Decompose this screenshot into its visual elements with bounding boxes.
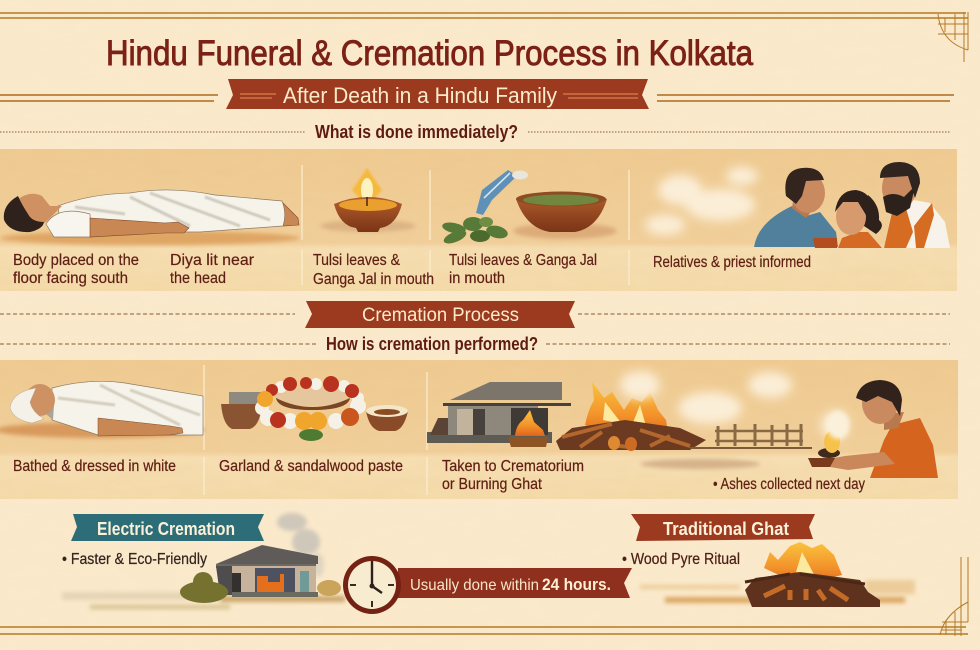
banner [398, 568, 632, 598]
caption: floor facing south: floor facing south [13, 270, 128, 287]
caption: diya lit: Diya lit near [170, 252, 254, 269]
callout: usually done within 24 hours [343, 556, 632, 614]
caption: tulsi and ganga jal: Tulsi leaves & Ganga Jal [449, 252, 597, 269]
smoke clouds [645, 167, 758, 235]
icon: spoon pouring Ganga Jal [476, 170, 528, 215]
captions [13, 252, 811, 288]
caption: the head: the head [170, 270, 226, 287]
caption: relatives: Relatives & priest informed [653, 254, 811, 271]
heading ribbon: Cremation Process [0, 301, 950, 328]
caption: burning ghat: or Burning Ghat [442, 476, 543, 493]
caption: in mouth: in mouth [449, 270, 505, 287]
caption: ashes collected: • Ashes collected next day [713, 476, 865, 493]
illustration: burning pyre [556, 382, 706, 451]
illustration: body dressed in white [10, 381, 203, 436]
illustration: man collecting ashes [808, 380, 938, 478]
illustration: fence [690, 424, 812, 448]
smoke [277, 513, 324, 577]
icon: bowl of tulsi water [513, 192, 617, 239]
illustration: relatives and priest [754, 162, 950, 248]
illustration: body on floor [4, 190, 299, 237]
icon: electric crematorium building [216, 545, 318, 597]
icon: lit diya [320, 168, 416, 232]
caption: tulsi leaves: Tulsi leaves & [313, 252, 401, 269]
illustration: crematorium building [427, 382, 571, 447]
illustration: sandalwood block in bowl [221, 392, 262, 429]
banner: Usually done within [410, 577, 539, 594]
ribbon: Electric Cremation: Electric Cremation [97, 519, 235, 539]
subheading: How is cremation performed?: How is cremation performed? [326, 334, 538, 354]
caption: body placed: Body placed on the [13, 252, 139, 269]
icon: bushes [180, 572, 341, 603]
bullet: wood pyre ritual: • Wood Pyre Ritual [622, 551, 740, 568]
ribbon: Traditional Ghat: Traditional Ghat [663, 519, 789, 539]
title: Hindu Funeral & Cremation Process in Kolkata [106, 34, 753, 73]
bottom decorative border with corner ornament [0, 557, 968, 636]
panel: traditional ghat [622, 514, 915, 607]
heading ribbon: Cremation Process: Cremation Process [362, 305, 519, 326]
subheading: What is done immediately?: What is done immediately? [315, 122, 518, 142]
caption: ganga jal: Ganga Jal in mouth [313, 271, 434, 288]
ground wash [640, 580, 915, 603]
illustration: flower garland [255, 376, 366, 441]
bullet: faster and eco-friendly: • Faster & Eco-Friendly [62, 551, 207, 568]
banner: 24 hours. [542, 575, 611, 594]
caption: garland: Garland & sandalwood paste [219, 458, 403, 475]
smoke [620, 371, 849, 439]
icon: tulsi leaves [441, 217, 509, 246]
panel: immediate steps [0, 149, 957, 291]
top decorative border with corner ornament [0, 12, 968, 62]
ribbon: Electric Cremation [71, 514, 264, 541]
ribbon: Traditional Ghat [631, 514, 815, 541]
icon: clock [343, 556, 401, 614]
illustration: paste bowl [366, 405, 408, 431]
heading ribbon: After Death in a Hindu Family: After Death in a Hindu Family [283, 83, 557, 108]
heading ribbon: After Death in a Hindu Family [0, 79, 954, 109]
panel: electric cremation [62, 513, 345, 609]
caption: taken to crematorium: Taken to Crematorium [442, 458, 584, 475]
icon: pyre [745, 542, 880, 607]
captions [13, 458, 865, 493]
ground wash [62, 592, 345, 609]
panel: cremation process [0, 360, 958, 499]
caption: bathed: Bathed & dressed in white [13, 458, 176, 475]
